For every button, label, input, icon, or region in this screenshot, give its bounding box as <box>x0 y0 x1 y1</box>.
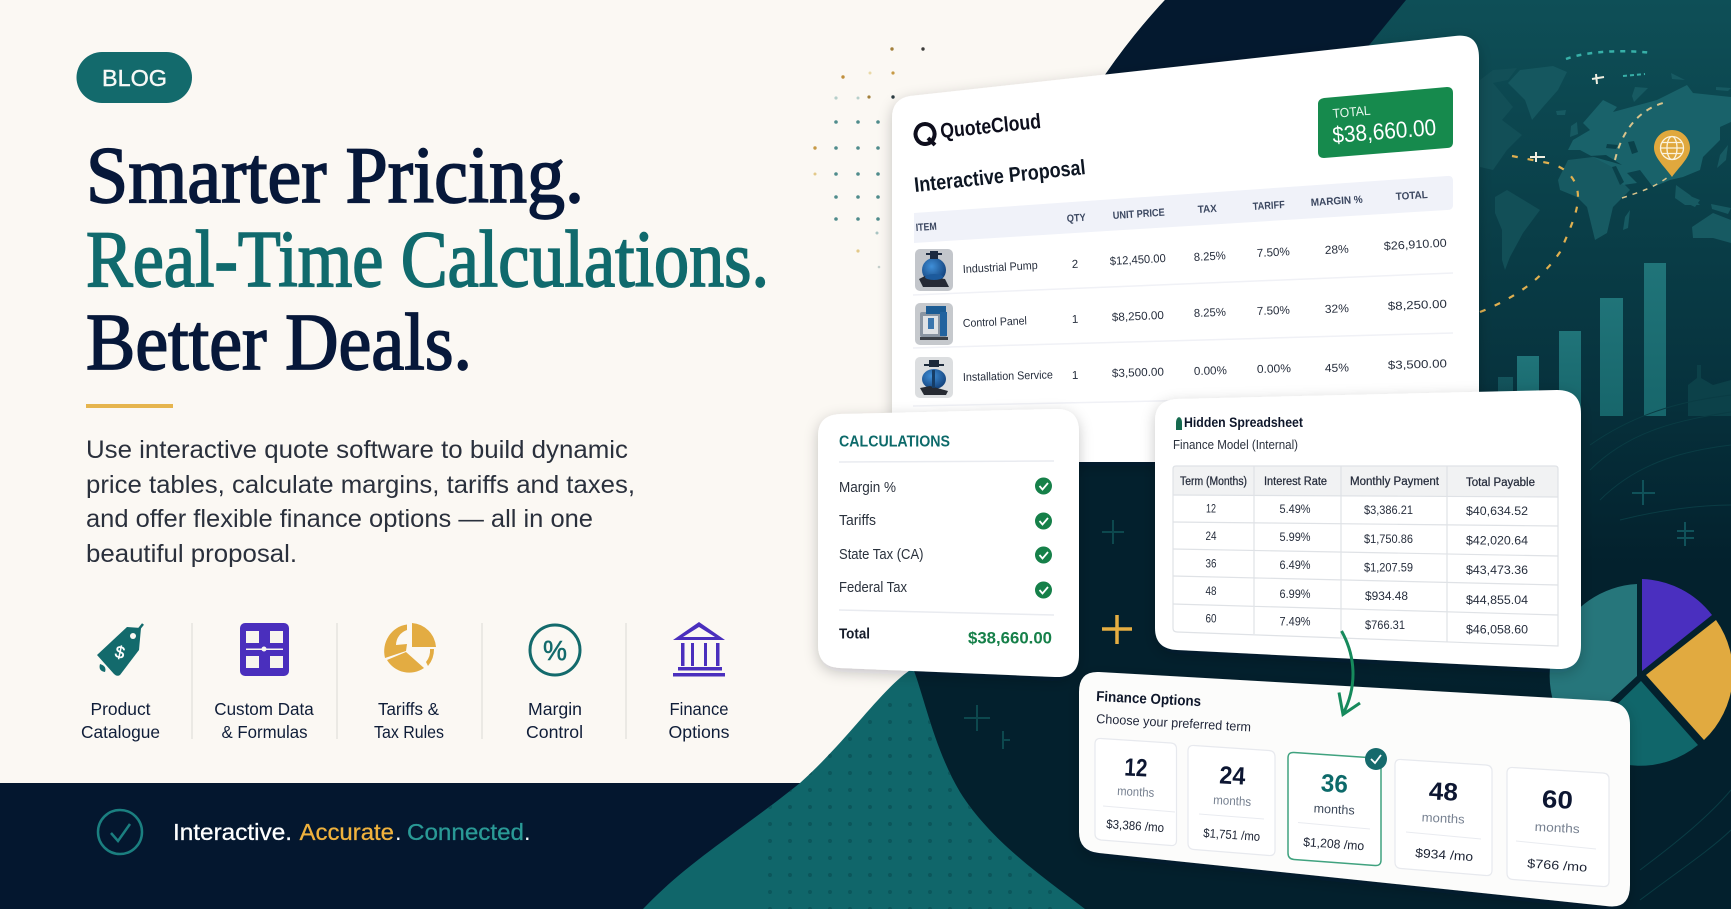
body paragraph: price tables, calculate margins, tariffs and taxes, <box>86 471 635 499</box>
finance heading <box>1096 689 1251 734</box>
decorative dot grid <box>813 47 925 268</box>
finance table: Term (Months) <box>1180 476 1247 488</box>
row: Installation Service: Installation Service <box>963 369 1053 384</box>
calculations total: $38,660.00 <box>968 628 1052 648</box>
label: Product Catalogue: Product <box>90 699 151 719</box>
row: Control Panel: $8,250.00 <box>1388 299 1447 313</box>
row: Industrial Pump: Industrial Pump <box>963 260 1038 276</box>
label: Product Catalogue <box>81 699 160 742</box>
label: Custom Data & Formulas: & Formulas <box>222 722 308 742</box>
panel: calculations: CALCULATIONS <box>839 434 950 450</box>
footer tagline: . <box>524 819 531 845</box>
finance heading: Finance Options <box>1096 689 1201 710</box>
table header: QTY <box>1066 212 1086 225</box>
faint port silhouette <box>1688 365 1731 416</box>
label: Finance Options <box>668 699 730 742</box>
sheet heading <box>1173 414 1303 452</box>
finance table: $934.48 <box>1365 591 1408 603</box>
label: Margin Control <box>526 699 583 742</box>
body paragraph <box>86 436 635 568</box>
panel: finance options <box>1079 672 1630 907</box>
table header: TARIFF <box>1252 199 1286 213</box>
finance table: $42,020.64 <box>1466 536 1529 548</box>
option: 36 months selected: $1,208 /mo <box>1303 835 1365 853</box>
footer tagline: Connected <box>407 819 524 845</box>
row: Control Panel <box>915 299 1447 345</box>
sheet heading: Finance Model (Internal) <box>1173 438 1298 452</box>
finance table: 36 <box>1206 558 1216 570</box>
location pin <box>1654 130 1690 177</box>
option: 12 months: $3,386 /mo <box>1106 817 1165 835</box>
icon: check circle <box>98 810 142 854</box>
finance table: 6.49% <box>1280 560 1310 572</box>
row: Installation Service <box>915 357 1447 398</box>
option: 60 months: 60 <box>1541 785 1574 815</box>
logo <box>916 110 1042 145</box>
icon: percent: % <box>543 635 567 666</box>
panel: calculations <box>818 409 1079 677</box>
checklist: Federal Tax <box>839 580 908 596</box>
icon: bank <box>673 622 725 676</box>
option: 12 months: months <box>1117 784 1155 800</box>
label: Margin Control: Margin <box>528 699 582 719</box>
option: 48 months: $934 /mo <box>1415 846 1474 864</box>
finance table: $44,855.04 <box>1466 595 1529 607</box>
logo: QuoteCloud <box>939 110 1042 143</box>
row: Control Panel: 7.50% <box>1257 305 1290 318</box>
icon: percent <box>530 625 580 675</box>
finance table: 5.99% <box>1280 532 1310 544</box>
title: Better Deals. <box>86 299 472 387</box>
feature row <box>81 622 730 742</box>
finance table: $43,473.36 <box>1466 565 1528 577</box>
row: Installation Service: $3,500.00 <box>1388 358 1447 372</box>
row: Control Panel: $8,250.00 <box>1112 310 1164 324</box>
footer tagline: Accurate <box>300 819 394 845</box>
label: Tariffs & Tax Rules: Tax Rules <box>374 722 444 742</box>
table header: UNIT PRICE <box>1112 207 1165 222</box>
option: 60 months: $766 /mo <box>1527 857 1588 875</box>
table header: TOTAL <box>1395 189 1429 203</box>
label: Custom Data & Formulas: Custom Data <box>214 699 314 719</box>
option: 36 months selected: 36 <box>1320 769 1349 799</box>
panel: hidden spreadsheet <box>1155 390 1581 669</box>
option: 24 months <box>1188 745 1275 856</box>
option: 24 months: 24 <box>1219 761 1246 791</box>
row: Control Panel: Control Panel <box>963 315 1027 330</box>
finance table: Interest Rate <box>1264 476 1327 488</box>
body paragraph: Use interactive quote software to build dynamic <box>86 436 628 464</box>
calculations total <box>839 626 1052 648</box>
option: 60 months: months <box>1534 820 1580 836</box>
checklist: Margin % <box>839 480 896 496</box>
option: 48 months: 48 <box>1428 777 1459 807</box>
row: Installation Service: 0.00% <box>1194 365 1227 378</box>
footer tagline: Interactive. <box>173 819 292 845</box>
table header: TAX <box>1197 203 1217 216</box>
checklist: Tariffs <box>839 513 876 529</box>
finance table: 48 <box>1206 586 1216 598</box>
table header: MARGIN % <box>1310 194 1364 209</box>
option: 12 months <box>1095 738 1176 846</box>
thumbnail: pump <box>915 249 953 291</box>
finance table: $1,750.86 <box>1364 534 1413 546</box>
selected check badge <box>1365 748 1387 770</box>
row: Industrial Pump <box>915 238 1447 291</box>
label: Margin Control: Control <box>526 722 583 742</box>
gold divider <box>86 404 173 408</box>
total badge <box>1318 87 1453 158</box>
label: Finance Options: Finance <box>670 699 728 719</box>
row: Industrial Pump: $26,910.00 <box>1384 238 1447 253</box>
finance table: 60 <box>1206 614 1216 626</box>
BLOG badge <box>76 52 192 103</box>
sheet heading: Hidden Spreadsheet <box>1184 414 1303 430</box>
total badge: $38,660.00 <box>1331 114 1437 148</box>
pie chart <box>1550 579 1731 766</box>
finance table: Total Payable <box>1466 477 1535 489</box>
bar chart <box>1498 263 1666 416</box>
option: 24 months: $1,751 /mo <box>1203 826 1261 844</box>
footer tagline <box>98 810 531 854</box>
total badge: TOTAL <box>1332 103 1371 121</box>
row: Industrial Pump: 2 <box>1072 259 1079 271</box>
option: 24 months: months <box>1213 793 1252 809</box>
icon: pie <box>384 623 436 673</box>
finance table: 6.99% <box>1280 589 1310 601</box>
thumbnail: service <box>915 357 953 398</box>
finance table <box>1173 466 1558 646</box>
option: 36 months selected <box>1288 748 1387 866</box>
arrow: spreadsheet to finance options <box>1339 631 1360 714</box>
heading: Interactive Proposal: Interactive Proposal <box>913 156 1087 197</box>
checklist <box>839 478 1052 598</box>
finance table: 24 <box>1206 531 1217 543</box>
body paragraph: beautiful proposal. <box>86 540 297 568</box>
row: Industrial Pump: 8.25% <box>1194 250 1226 264</box>
label: Product Catalogue: Catalogue <box>81 722 160 742</box>
label: Tariffs & Tax Rules: Tariffs & <box>378 699 439 719</box>
world map <box>1480 66 1731 270</box>
footer tagline: . <box>395 819 402 845</box>
body paragraph: and offer flexible finance options — all in one <box>86 505 593 533</box>
option: 60 months <box>1507 767 1609 887</box>
title: Smarter Pricing. <box>86 132 584 220</box>
finance table: $40,634.52 <box>1466 506 1528 518</box>
checklist: State Tax (CA) <box>839 547 924 563</box>
table header: ITEM <box>915 221 937 234</box>
row: Control Panel: 32% <box>1325 303 1349 316</box>
row: Industrial Pump: 7.50% <box>1257 246 1290 260</box>
icon: price tag <box>97 624 143 676</box>
gold plus sign <box>1102 615 1132 644</box>
finance table: $3,386.21 <box>1364 505 1413 517</box>
route lines <box>1480 51 1668 312</box>
title: Real-Time Calculations. <box>86 216 769 304</box>
option: 12 months: 12 <box>1124 753 1148 783</box>
finance heading: Choose your preferred term <box>1096 711 1251 734</box>
table header <box>914 176 1453 243</box>
label: Finance Options: Options <box>668 722 730 742</box>
finance table: $1,207.59 <box>1364 562 1413 574</box>
map seas <box>1590 141 1638 185</box>
option: 36 months selected: months <box>1313 801 1355 818</box>
label: Tariffs & Tax Rules <box>374 699 444 742</box>
row: Industrial Pump: $12,450.00 <box>1110 253 1166 268</box>
faint contour lines <box>964 395 1731 900</box>
option: 48 months: months <box>1421 810 1465 827</box>
label: Custom Data & Formulas <box>214 699 314 742</box>
row: Installation Service: 45% <box>1325 362 1349 375</box>
title <box>86 132 769 387</box>
thumbnail: panel <box>915 303 953 345</box>
finance table: $46,058.60 <box>1466 624 1528 636</box>
row: Installation Service: $3,500.00 <box>1112 367 1164 380</box>
icon: price tag: $ <box>113 642 127 663</box>
finance table: 12 <box>1206 504 1216 516</box>
teal blob <box>643 668 1085 909</box>
row: Installation Service: 1 <box>1072 370 1078 382</box>
BLOG badge: BLOG <box>102 65 167 91</box>
icon: data grid <box>240 623 289 676</box>
row: Industrial Pump: 28% <box>1325 244 1349 257</box>
row: Control Panel: 1 <box>1072 314 1079 326</box>
footer band <box>0 783 820 909</box>
option: 48 months <box>1395 759 1492 876</box>
finance table: $766.31 <box>1365 620 1405 632</box>
finance table: 7.49% <box>1280 616 1310 628</box>
finance table: 5.49% <box>1280 504 1310 516</box>
finance table: Monthly Payment <box>1350 476 1440 488</box>
calculations total: Total <box>839 626 870 642</box>
panel: quote proposal <box>892 36 1479 462</box>
row: Installation Service: 0.00% <box>1257 363 1291 376</box>
row: Control Panel: 8.25% <box>1194 307 1226 320</box>
